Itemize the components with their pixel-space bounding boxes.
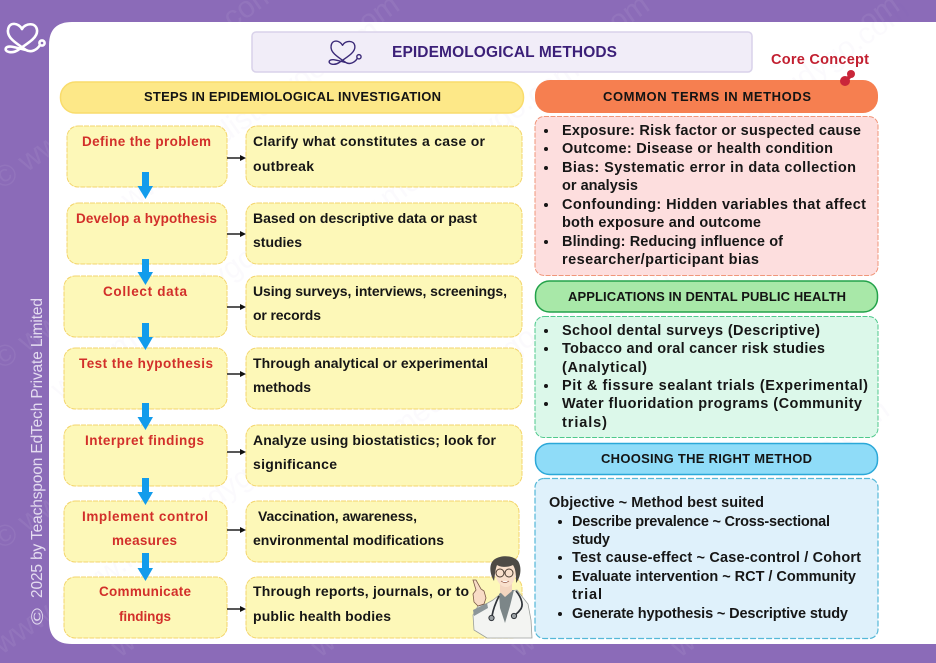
panel: common terms: or analysis [562,178,638,194]
text: www.medistudygo.com [44,203,315,406]
panel: common terms: Blinding: Reducing influence of [562,234,783,250]
step 6: measures [112,533,177,548]
step 3 detail [246,276,522,337]
core concept label: Core Concept [771,52,869,68]
panel: applications: Water fluoridation programs (Community [562,396,862,412]
step 7 [64,577,227,638]
copyright side text: © [28,607,47,625]
step 4 detail [246,348,522,409]
heading: steps in epidemiological investigation: STEPS IN EPIDEMIOLOGICAL INVESTIGATION [144,89,441,104]
text: www.medistudygo.com [624,393,895,596]
panel: choosing method: study [572,532,610,548]
step 5 detail: Analyze using biostatistics; look for [253,432,497,448]
panel: applications: (Analytical) [562,360,647,376]
panel: choosing method [535,478,878,638]
panel: choosing method: Test cause-effect ~ Case-control / Cohort [572,550,861,566]
step 4 [64,348,227,409]
step 2 detail [246,203,522,264]
step 2 [67,203,227,264]
panel: applications: trials) [562,415,607,431]
panel: choosing method: Describe prevalence ~ Cross-sectional [572,514,830,530]
step 6: Implement control [82,509,208,524]
text: www.medistudygo.com [304,461,575,663]
step 3 detail: Using surveys, interviews, screenings, [253,283,507,299]
text: www.medistudygo.com [54,413,325,616]
step 4: Test the hypothesis [79,356,213,371]
step 1 detail: Clarify what constitutes a case or [253,133,486,149]
heading: choosing the right method: CHOOSING THE RIGHT METHOD [601,451,812,466]
illustration: doctor pointing [473,556,532,638]
panel: choosing method: Evaluate intervention ~ RCT / Community [572,569,856,585]
step 5 detail: significance [253,456,337,472]
step 4 detail: Through analytical or experimental [253,355,488,371]
heading: steps in epidemiological investigation [60,82,524,113]
step 1 detail [246,126,522,187]
text: www.medistudygo.com [314,53,585,256]
title text: EPIDEMOLOGICAL METHODS [392,44,617,61]
panel: applications: Pit & fissure sealant trials (Experimental) [562,378,868,394]
text: www.medistudygo.com [504,461,775,663]
coat [473,590,532,638]
step 6 detail [246,501,519,562]
panel: choosing method: Generate hypothesis ~ Descriptive study [572,606,848,622]
copyright side text: 2025 by Teachspoon EdTech Private Limited [29,298,46,598]
step 1 [67,126,227,187]
smile [501,581,509,582]
face [494,560,517,587]
step 7: findings [119,609,171,624]
step 7 detail: Through reports, journals, or to [253,583,469,599]
step 5: Interpret findings [85,433,204,448]
panel: choosing method: trial [572,587,602,603]
step 5 [64,425,227,486]
panel: common terms: both exposure and outcome [562,215,761,231]
heading: common terms in methods [535,80,878,113]
panel: common terms: Bias: Systematic error in data collection [562,160,856,176]
step 6 detail: Vaccination, awareness, [258,508,417,524]
heading: common terms in methods: COMMON TERMS IN METHODS [603,89,811,104]
text: www.medistudygo.com [324,283,595,486]
hand [473,580,486,606]
text: www.medistudygo.com [584,133,855,336]
panel: applications: School dental surveys (Descriptive) [562,323,820,339]
step 7 detail [246,577,522,638]
panel: applications [535,316,878,438]
text: www.medistudygo.com [104,461,375,663]
title banner [252,32,752,72]
icon: red pin [840,70,855,86]
heading: applications in dental public health: APPLICATIONS IN DENTAL PUBLIC HEALTH [568,289,846,304]
step 3 detail: or records [253,307,321,323]
hair [490,556,520,583]
panel: choosing method: Objective ~ Method best suited [549,495,764,511]
step 5 detail [246,425,522,486]
step 3 [64,276,227,337]
step 4 detail: methods [253,379,311,395]
panel: applications: Tobacco and oral cancer risk studies [562,341,825,357]
step 6 detail: environmental modifications [253,532,444,548]
shirt [499,590,514,623]
panel: common terms: Exposure: Risk factor or suspected cause [562,123,861,139]
logo: heart stethoscope [6,24,45,52]
black connector arrows [227,155,246,612]
step 7: Communicate [99,584,191,599]
step 1: Define the problem [82,134,211,149]
step 3: Collect data [103,284,187,299]
step 7 detail: public health bodies [253,608,391,624]
stethoscope [492,591,522,616]
heading: applications in dental public health [536,281,878,312]
panel: common terms: Confounding: Hidden variables that affect [562,197,866,213]
step 2: Develop a hypothesis [76,211,217,226]
text: www.medistudygo.com [114,13,385,216]
neck [500,583,512,597]
glasses [496,569,504,577]
step 2 detail: studies [253,234,302,250]
text: www.medistudygo.com [664,461,935,663]
step 6 [64,501,227,562]
blue downward arrows [138,172,153,581]
sleeve cuff [473,603,488,616]
panel: common terms: Outcome: Disease or health condition [562,141,833,157]
heading: choosing the right method [536,444,878,474]
panel: common terms: researcher/participant bias [562,252,759,268]
panel: common terms [535,116,878,276]
icon: heart stethoscope [329,41,361,64]
step 1 detail: outbreak [253,158,314,174]
step 2 detail: Based on descriptive data or past [253,210,477,226]
